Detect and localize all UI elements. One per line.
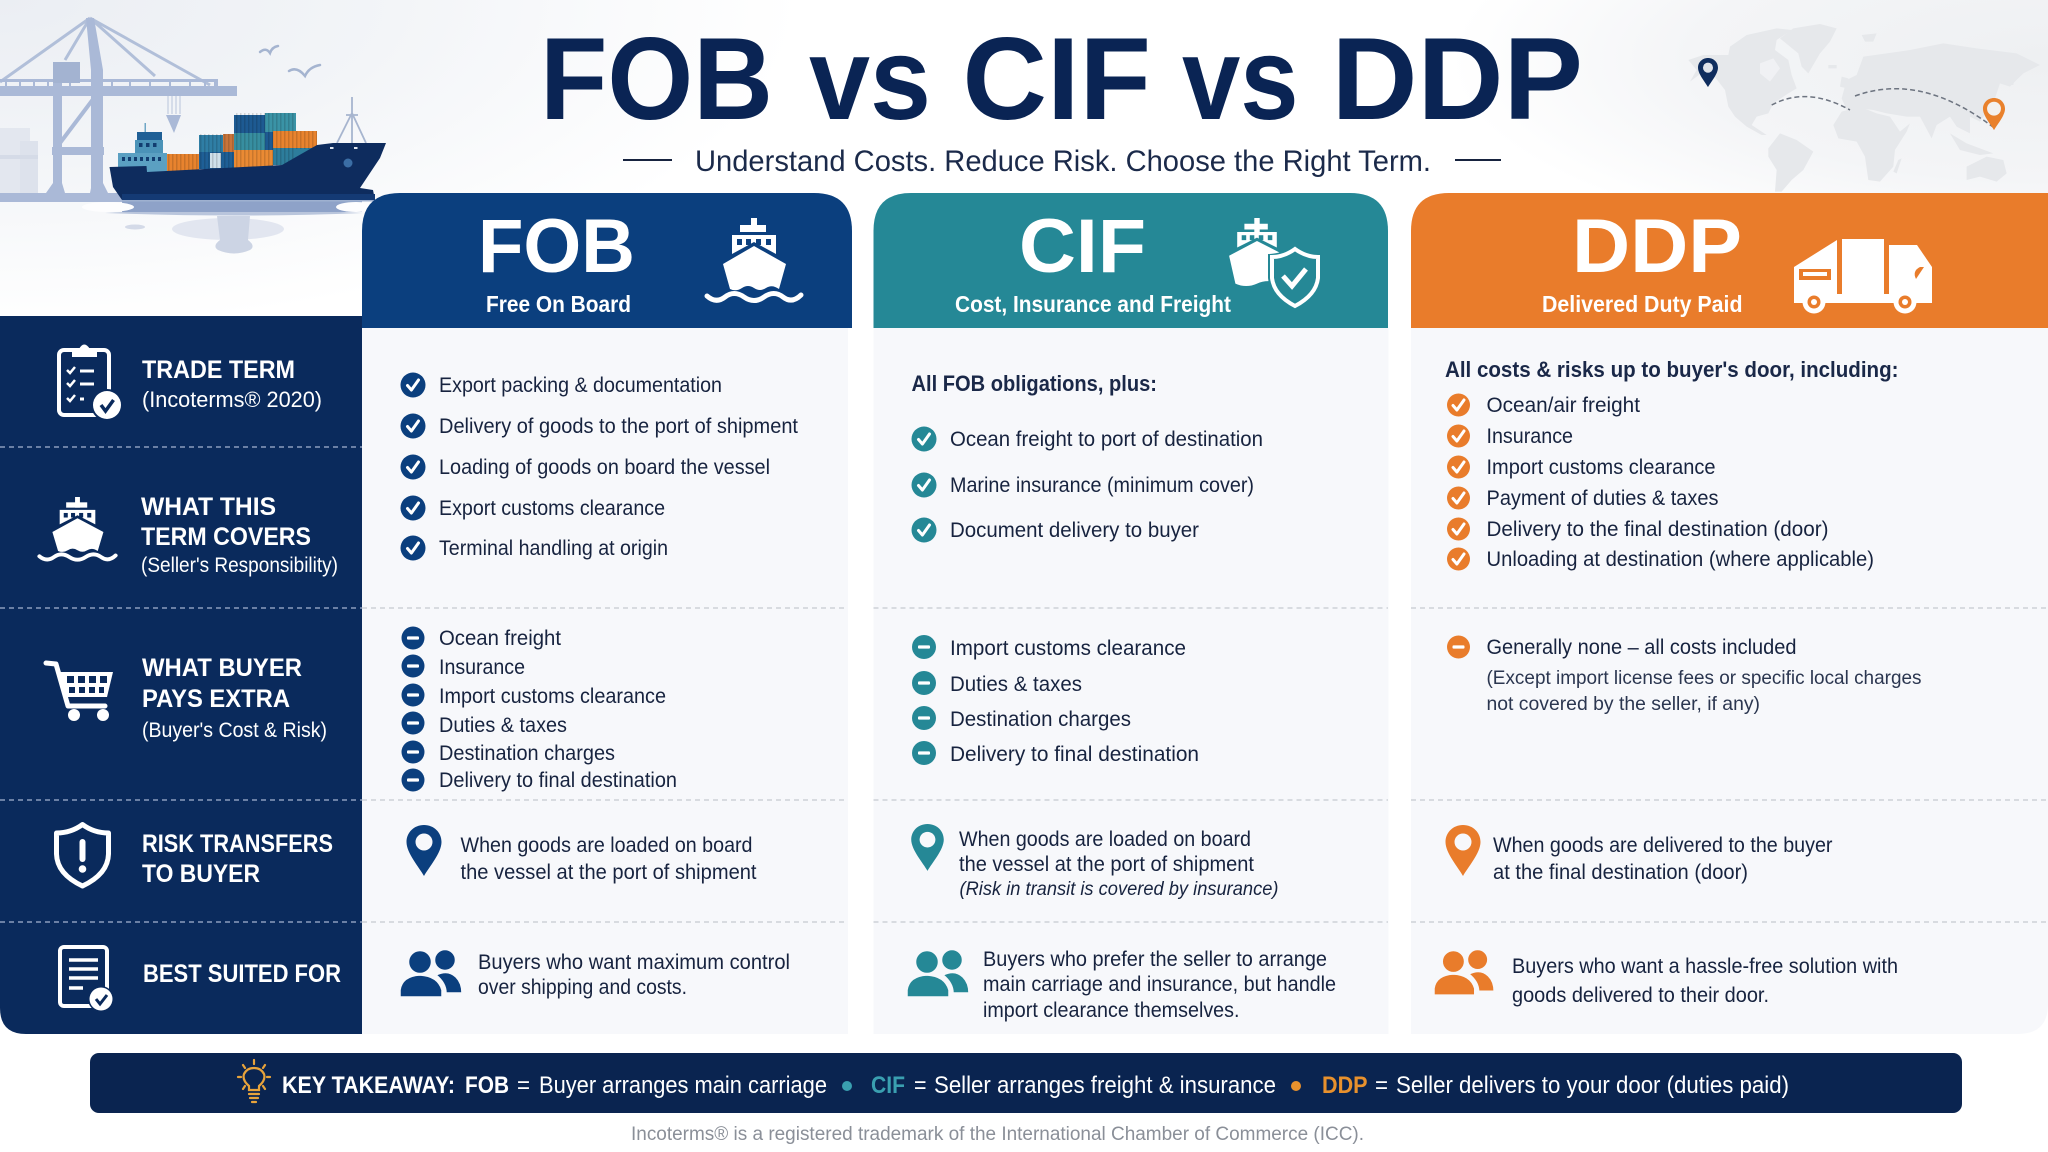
icon: orange map pin (1983, 98, 2005, 130)
list: FOB buyer pays: Ocean freight (439, 627, 561, 650)
list: DDP seller covers: Insurance (1486, 425, 1573, 448)
best suited: CIF: import clearance themselves. (983, 999, 1240, 1022)
row label: what buyer pays extra (46, 654, 327, 742)
best suited: DDP (1434, 950, 1898, 1007)
panel: CIF column (874, 193, 1388, 1034)
callout: key takeaway bar: KEY TAKEAWAY: (282, 1072, 455, 1099)
panel: FOB column (362, 193, 852, 1034)
list: DDP seller covers: Payment of duties & taxes (1486, 487, 1718, 510)
note: DDP buyer pays (1447, 636, 1922, 715)
title: vs (809, 13, 931, 144)
best suited: CIF: Buyers who prefer the seller to arrange (983, 948, 1327, 971)
callout: key takeaway bar: FOB (465, 1072, 509, 1099)
list: FOB seller covers: Terminal handling at origin (439, 537, 668, 560)
list: FOB buyer pays: Insurance (439, 656, 525, 679)
list: FOB seller covers: Export customs clearance (439, 497, 665, 520)
list: DDP seller covers (1447, 394, 1874, 571)
header: FOB: Free On Board (486, 291, 631, 317)
footnote: Incoterms® is a registered trademark of the International Chamber of Commerce (ICC). (631, 1124, 1364, 1145)
list: FOB buyer pays: Import customs clearance (439, 685, 666, 708)
list: DDP seller covers: Unloading at destination (where applicable) (1486, 548, 1874, 571)
callout: key takeaway bar: = (517, 1072, 530, 1099)
list: CIF seller covers: Ocean freight to port of destination (950, 428, 1263, 451)
callout: key takeaway bar: = (1375, 1072, 1388, 1099)
title: CIF (962, 13, 1151, 144)
row label: what this term covers: WHAT THIS (141, 493, 276, 521)
list: FOB seller covers (400, 372, 798, 560)
best suited: FOB: Buyers who want maximum control (478, 951, 790, 974)
list: CIF buyer pays: Duties & taxes (950, 673, 1082, 696)
list: FOB buyer pays (402, 626, 677, 792)
risk transfer: CIF: (Risk in transit is covered by insurance) (960, 879, 1278, 900)
callout: key takeaway bar: CIF (871, 1072, 905, 1099)
header: DDP (1411, 193, 2048, 328)
best suited: DDP: goods delivered to their door. (1512, 984, 1769, 1007)
list: CIF buyer pays (912, 635, 1199, 766)
illustration: container ship (110, 97, 386, 202)
illustration: world map (1688, 24, 2040, 192)
list: CIF seller covers (912, 426, 1263, 542)
note: DDP buyer pays: Generally none – all costs included (1486, 636, 1796, 659)
list: FOB buyer pays: Delivery to final destination (439, 769, 677, 792)
callout: key takeaway bar: Seller delivers to your door (duties paid) (1396, 1072, 1789, 1099)
row label: what buyer pays extra: WHAT BUYER (142, 654, 302, 682)
title: DDP (1332, 13, 1583, 144)
risk transfer: FOB: When goods are loaded on board (460, 834, 752, 857)
list: DDP seller covers: Ocean/air freight (1486, 394, 1640, 417)
risk transfer: DDP: When goods are delivered to the buyer (1493, 834, 1832, 857)
panel: row labels sidebar (0, 316, 362, 1034)
list: FOB seller covers: Loading of goods on board the vessel (439, 456, 770, 479)
row label: what this term covers: TERM COVERS (141, 523, 311, 551)
list: DDP seller covers: Import customs clearance (1486, 456, 1716, 479)
icon: navy map pin (1698, 58, 1718, 87)
risk transfer: DDP (1446, 825, 1832, 884)
list: CIF buyer pays: Delivery to final destination (950, 743, 1199, 766)
title: vs (1182, 13, 1299, 144)
best suited: FOB (400, 950, 790, 999)
row label: best suited for (60, 947, 341, 1012)
row label: what buyer pays extra: (Buyer's Cost & Risk) (142, 719, 327, 742)
note: DDP buyer pays: (Except import license fees or specific local charges (1486, 667, 1922, 689)
risk transfer: DDP: at the final destination (door) (1493, 861, 1748, 884)
row label: what this term covers: (Seller's Responsibility) (141, 554, 338, 577)
subtitle: Understand Costs. Reduce Risk. Choose the Right Term. (695, 145, 1431, 178)
header: FOB: FOB (478, 204, 635, 289)
icon: light bulb (238, 1060, 270, 1102)
row label: what this term covers (39, 493, 338, 577)
title: FOB (540, 13, 773, 144)
best suited: CIF: main carriage and insurance, but handle (983, 973, 1336, 996)
header: DDP: Delivered Duty Paid (1542, 291, 1742, 317)
best suited: CIF (907, 948, 1336, 1022)
lead-in: DDP: All costs & risks up to buyer's door, including: (1445, 357, 1898, 382)
risk transfer: FOB: the vessel at the port of shipment (460, 861, 757, 884)
list: DDP seller covers: Delivery to the final destination (door) (1486, 518, 1828, 541)
callout: key takeaway bar: = (914, 1072, 926, 1099)
list: FOB seller covers: Delivery of goods to the port of shipment (439, 415, 798, 438)
note: DDP buyer pays: not covered by the seller, if any) (1486, 693, 1760, 715)
row label: trade term: (Incoterms® 2020) (142, 387, 322, 412)
risk transfer: CIF: When goods are loaded on board (959, 828, 1251, 851)
risk transfer: CIF: the vessel at the port of shipment (959, 853, 1254, 876)
row label: best suited for: BEST SUITED FOR (143, 960, 341, 988)
illustration: water reflection (82, 200, 376, 254)
row label: risk transfers to buyer (56, 824, 333, 888)
callout: key takeaway bar (90, 1053, 1962, 1113)
title (540, 13, 1583, 144)
header: CIF: CIF (1019, 204, 1146, 289)
row label: risk transfers to buyer: RISK TRANSFERS (142, 830, 333, 858)
list: FOB buyer pays: Destination charges (439, 742, 615, 765)
panel: DDP column (1411, 193, 2048, 1034)
row label: trade term (59, 344, 322, 421)
callout: key takeaway bar: Seller arranges freight & insurance (934, 1072, 1276, 1099)
header: CIF: Cost, Insurance and Freight (955, 291, 1231, 317)
row label: what buyer pays extra: PAYS EXTRA (142, 685, 290, 713)
list: FOB seller covers: Export packing & documentation (439, 374, 722, 397)
header: CIF (874, 193, 1388, 328)
list: FOB buyer pays: Duties & taxes (439, 714, 567, 737)
list: CIF buyer pays: Import customs clearance (950, 637, 1186, 660)
risk transfer: FOB (406, 825, 757, 884)
list: CIF seller covers: Document delivery to buyer (950, 519, 1199, 542)
callout: key takeaway bar: Buyer arranges main carriage (539, 1072, 827, 1099)
list: CIF buyer pays: Destination charges (950, 708, 1131, 731)
illustration: birds (260, 46, 320, 76)
callout: key takeaway bar: DDP (1322, 1072, 1368, 1099)
illustration: port crane (0, 18, 237, 202)
header: FOB (362, 193, 852, 328)
row label: trade term: TRADE TERM (142, 356, 295, 384)
best suited: DDP: Buyers who want a hassle-free solution with (1512, 955, 1898, 978)
list: CIF seller covers: Marine insurance (minimum cover) (950, 474, 1254, 497)
lead-in: CIF: All FOB obligations, plus: (912, 371, 1157, 396)
header: DDP: DDP (1572, 204, 1742, 289)
best suited: FOB: over shipping and costs. (478, 976, 687, 999)
row label: risk transfers to buyer: TO BUYER (142, 860, 260, 888)
risk transfer: CIF (911, 824, 1278, 900)
